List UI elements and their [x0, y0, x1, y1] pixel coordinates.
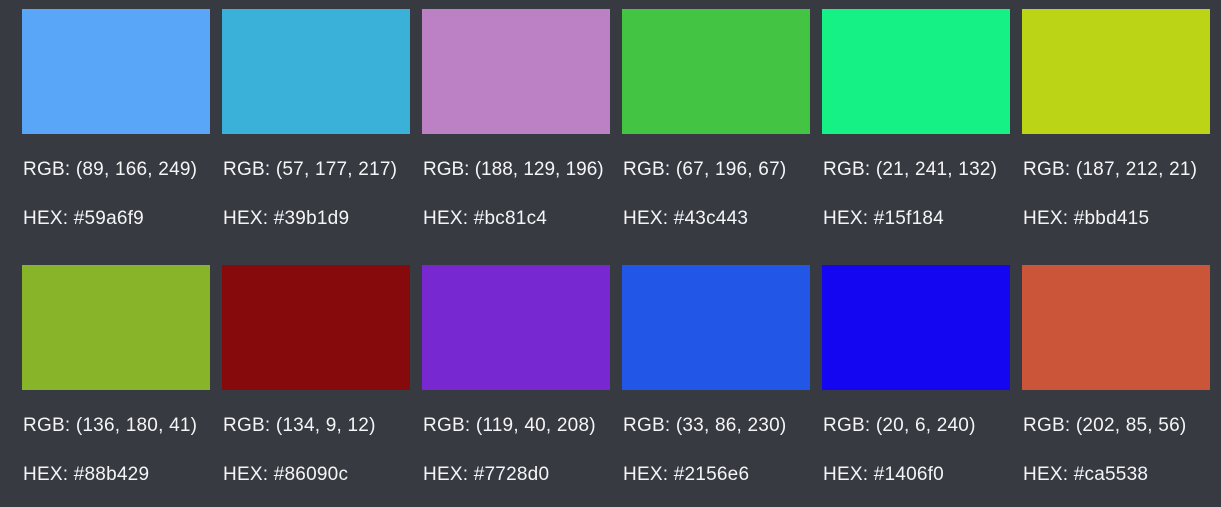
colour card: ca5538: HEX: #ca5538 — [1023, 464, 1148, 485]
colour card: bc81c4: RGB: (188, 129, 196) — [423, 159, 604, 180]
colour card: 1406f0: HEX: #1406f0 — [823, 464, 944, 485]
colour card: 39b1d9 — [222, 9, 410, 229]
colour card: 39b1d9: RGB: (57, 177, 217) — [223, 159, 397, 180]
colour card: 88b429 — [22, 265, 210, 485]
colour card: ca5538: RGB: (202, 85, 56) — [1023, 415, 1186, 436]
colour card: 2156e6 — [622, 265, 810, 485]
colour card: 7728d0 — [422, 265, 610, 485]
colour card: bc81c4: HEX: #bc81c4 — [423, 208, 547, 229]
colour card: 88b429: RGB: (136, 180, 41) — [23, 415, 197, 436]
colour card: 43c443: RGB: (67, 196, 67) — [623, 159, 786, 180]
colour card: 86090c — [222, 265, 410, 485]
colour card: 86090c: RGB: (134, 9, 12) — [223, 415, 376, 436]
colour card: ca5538 — [1022, 265, 1210, 485]
colour card: 15f184: RGB: (21, 241, 132) — [823, 159, 997, 180]
colour card: 7728d0: HEX: #7728d0 — [423, 464, 549, 485]
colour card: 15f184 — [822, 9, 1010, 229]
colour card: bbd415: RGB: (187, 212, 21) — [1023, 159, 1197, 180]
colour card: 88b429: HEX: #88b429 — [23, 464, 149, 485]
colour card: 39b1d9: HEX: #39b1d9 — [223, 208, 349, 229]
colour card: bbd415 — [1022, 9, 1210, 229]
colour card: 1406f0: RGB: (20, 6, 240) — [823, 415, 976, 436]
colour card: 15f184: HEX: #15f184 — [823, 208, 944, 229]
colour card: 59a6f9: RGB: (89, 166, 249) — [23, 159, 197, 180]
colour card: 2156e6: HEX: #2156e6 — [623, 464, 749, 485]
colour card: bbd415: HEX: #bbd415 — [1023, 208, 1149, 229]
colour card: 86090c: HEX: #86090c — [223, 464, 348, 485]
colour card: 43c443: HEX: #43c443 — [623, 208, 748, 229]
colour card: 59a6f9: HEX: #59a6f9 — [23, 208, 144, 229]
colour card: 1406f0 — [822, 265, 1010, 485]
colour card: 7728d0: RGB: (119, 40, 208) — [423, 415, 596, 436]
colour card: 59a6f9 — [22, 9, 210, 229]
colour card: bc81c4 — [422, 9, 610, 229]
colour card: 2156e6: RGB: (33, 86, 230) — [623, 415, 786, 436]
colour card: 43c443 — [622, 9, 810, 229]
